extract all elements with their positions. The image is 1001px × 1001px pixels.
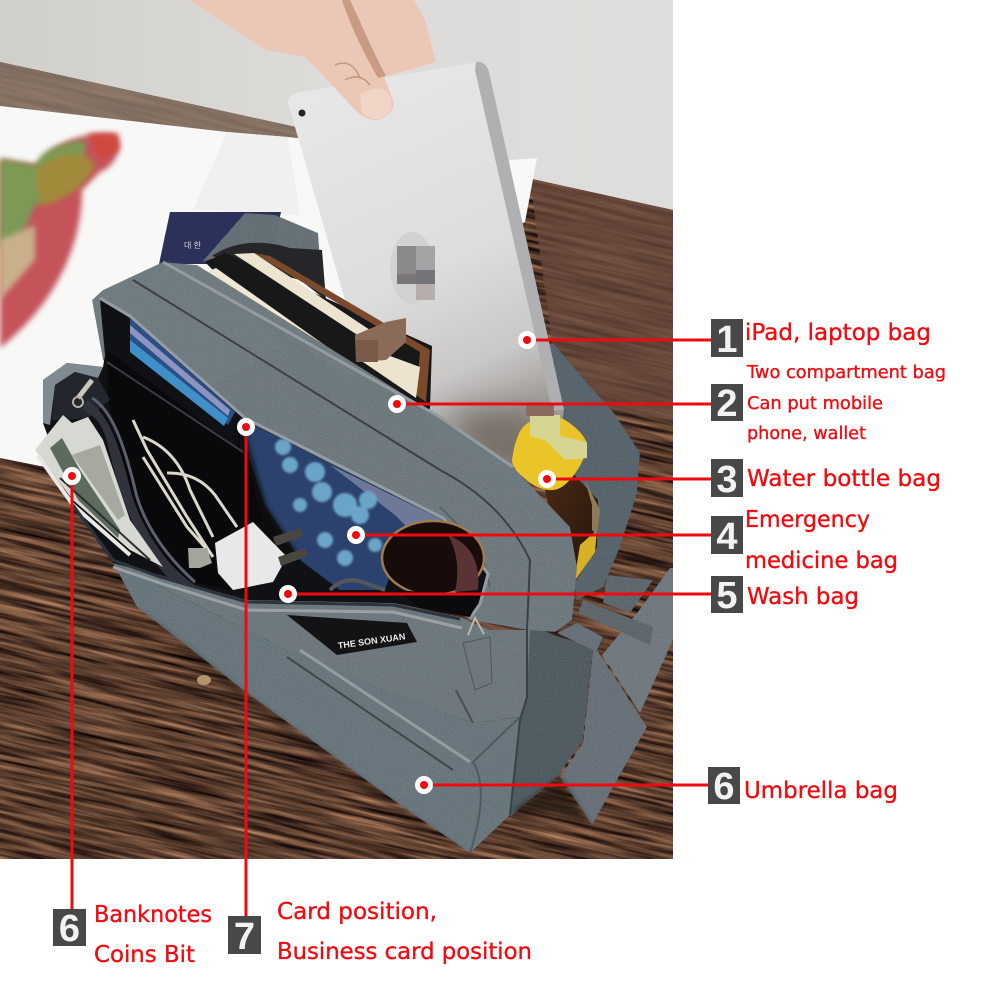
- notebook: [200, 253, 432, 430]
- open magazine: [0, 106, 537, 470]
- number badge 4: [711, 516, 743, 558]
- flap zipper tape: [73, 505, 462, 628]
- leader line 3: [547, 478, 711, 480]
- label 2: [746, 362, 946, 444]
- passport: [159, 212, 281, 264]
- number badge card: [228, 916, 261, 958]
- callout 4: emergency medicine bag: [347, 507, 898, 574]
- number badge 3: 3: [716, 459, 738, 501]
- water bottle: [512, 405, 600, 582]
- number badge 3: [711, 459, 743, 501]
- marker 3: [538, 470, 556, 488]
- lower pocket zipper: [287, 657, 453, 770]
- zipper pull: [78, 380, 92, 398]
- number badge banknotes: 6: [59, 908, 80, 950]
- callout 3: water bottle bag: [538, 459, 941, 501]
- label 1: iPad, laptop bag: [745, 320, 931, 346]
- label 4: medicine bag: [745, 548, 898, 574]
- strap back band: [603, 575, 653, 613]
- marker card: [237, 418, 255, 436]
- strap folded piece: [557, 623, 647, 825]
- handle: [202, 213, 320, 262]
- marker banknotes: [63, 467, 81, 485]
- left zip pocket: [43, 363, 195, 585]
- label banknotes: Coins Bit: [94, 942, 195, 968]
- label 6: Umbrella bag: [744, 778, 898, 804]
- callout 1: iPad, laptop bag: [518, 319, 931, 361]
- label card: Business card position: [277, 939, 532, 965]
- wooden table: [0, 62, 673, 859]
- rim seams: [133, 262, 530, 815]
- marker 5: [279, 585, 297, 603]
- leader line 4: [356, 534, 711, 536]
- marker 2: [388, 395, 406, 413]
- number badge 6: [708, 766, 740, 808]
- label 5: Wash bag: [747, 584, 859, 610]
- bag side panel: [510, 625, 593, 817]
- blurred logo mosaic: [390, 232, 435, 304]
- USB connector: [188, 548, 212, 568]
- number badge 5: 5: [716, 575, 738, 617]
- table crumb: [197, 675, 211, 685]
- leader line card: [244, 427, 248, 916]
- shoulder strap: [557, 568, 673, 825]
- black inner pouch: [107, 350, 262, 590]
- leader line 6: [424, 784, 708, 786]
- brand tag: [287, 615, 417, 655]
- marker 4: [347, 526, 365, 544]
- marker 6: [415, 776, 433, 794]
- label 4: Emergency: [745, 507, 870, 533]
- strap right band: [602, 568, 673, 713]
- mesh blue pocket: [240, 418, 443, 590]
- label 4: [745, 507, 898, 574]
- callout 5: wash bag: [279, 575, 859, 617]
- wall background: [0, 0, 673, 215]
- zip puller metal: [468, 618, 484, 635]
- interior dark compartment: [43, 300, 487, 617]
- leader line 1: [527, 338, 711, 342]
- strap tab: [578, 600, 653, 645]
- callout 6: banknotes and coins: [53, 467, 212, 968]
- hand holding tablet: [189, 0, 436, 120]
- callout 6: umbrella bag: [415, 766, 898, 808]
- tablet: [288, 62, 564, 480]
- number badge banknotes: [53, 908, 86, 950]
- label 2: Can put mobile: [747, 393, 883, 414]
- label banknotes: Banknotes: [94, 902, 212, 928]
- bag main body: [92, 262, 593, 853]
- banknotes: [35, 415, 163, 567]
- number badge 1: 1: [716, 319, 738, 361]
- top rim panel: [92, 262, 577, 632]
- marker 1: [518, 331, 536, 349]
- photo: bag on a wooden table: [0, 0, 673, 859]
- label 2: Two compartment bag: [746, 362, 946, 383]
- keys: [330, 580, 385, 590]
- bag lower front panel: [113, 563, 520, 853]
- number badge 4: 4: [716, 516, 738, 558]
- number badge 5: [711, 575, 743, 617]
- brand tag: THE SON XUAN: [337, 631, 406, 651]
- number badge 1: [711, 319, 743, 361]
- charger plug: [215, 522, 308, 590]
- sunglasses: [382, 521, 484, 617]
- label banknotes: [94, 902, 212, 968]
- blue cards: [130, 318, 235, 426]
- white cables: [133, 420, 237, 557]
- number badge 6: 6: [713, 766, 735, 808]
- passport: 대 한: [184, 241, 202, 250]
- front flap: [113, 563, 530, 723]
- label card: Card position,: [277, 899, 437, 925]
- zip puller tab: [463, 637, 492, 690]
- shadow under bag: [137, 607, 470, 856]
- label 2: phone, wallet: [747, 423, 866, 444]
- label card: [277, 899, 532, 965]
- inner rim edge: [100, 298, 488, 618]
- number badge card: 7: [234, 916, 255, 958]
- label 3: Water bottle bag: [747, 466, 941, 492]
- leader line 5: [288, 592, 711, 596]
- number badge 2: 2: [716, 383, 738, 425]
- parrot picture: [0, 133, 120, 348]
- callout 7: card position: [228, 418, 532, 965]
- callout 2: two compartment bag: [388, 362, 946, 444]
- leader line 2: [397, 402, 711, 406]
- number badge 2: [711, 383, 743, 425]
- bag rear right side: [545, 343, 640, 600]
- leader line banknotes: [70, 476, 74, 909]
